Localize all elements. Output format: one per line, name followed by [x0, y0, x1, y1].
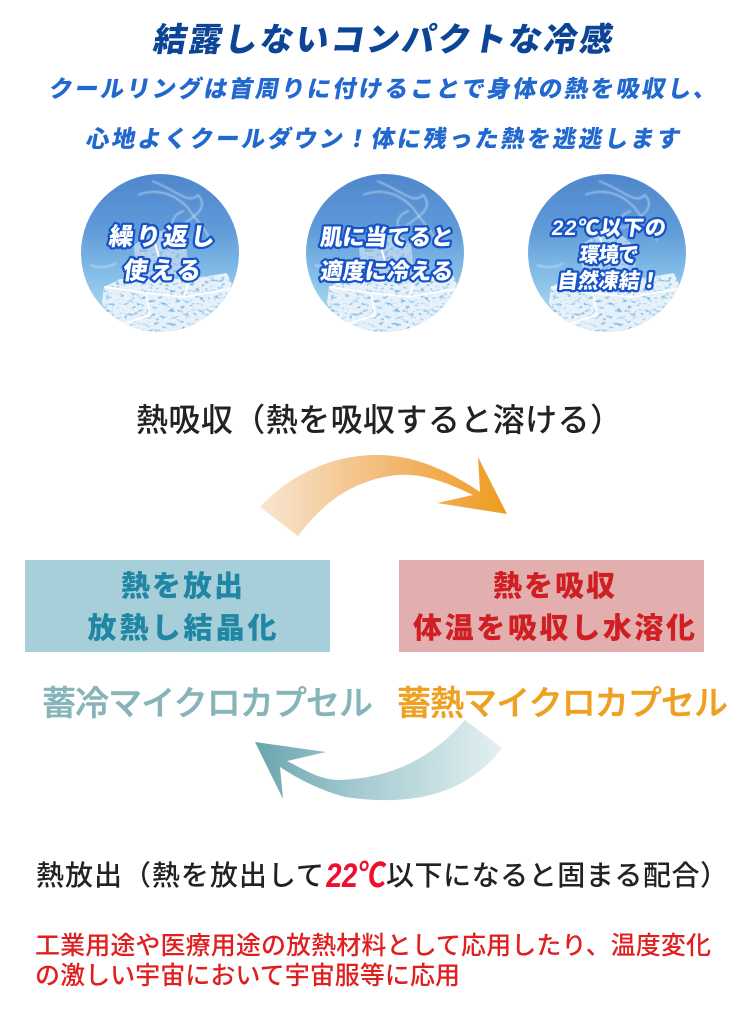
- arrow: orange curved right: [260, 455, 507, 536]
- subtitle text: クールリングは首周りに付けることで身体の熱を吸収し、: [47, 75, 720, 103]
- application note: [35, 932, 711, 990]
- feature badge: freezes below 22 degrees: 22℃以下の: [550, 217, 668, 240]
- panel: heat absorption: 熱を吸収: [493, 570, 615, 603]
- feature badge: freezes below 22 degrees: [527, 173, 687, 338]
- subtitle text: [47, 75, 720, 153]
- title: 結露しないコンパクトな冷感: [151, 21, 616, 59]
- heat release label: 熱放出（熱を放出して: [36, 860, 324, 891]
- heat release label: 以下になると固まる配合）: [386, 860, 728, 891]
- subtitle text: 心地よくクールダウン！体に残った熱を逃逃します: [84, 125, 683, 153]
- application note: 工業用途や医療用途の放熱材料として応用したり、温度変化: [35, 932, 711, 960]
- heat storage microcapsule label: 蓄熱マイクロカプセル: [397, 685, 728, 723]
- feature badge: cools when touching skin: 適度に冷える: [319, 259, 455, 284]
- heat release label: 22℃: [324, 857, 388, 895]
- heat release label: [36, 857, 728, 895]
- feature badge: reusable: [80, 173, 240, 338]
- panel: heat absorption: 体温を吸収し水溶化: [413, 612, 695, 645]
- panel: heat release: 放熱し結晶化: [88, 612, 276, 645]
- panel: heat absorption: [399, 560, 704, 652]
- feature badge: freezes below 22 degrees: 自然凍結！: [556, 268, 662, 293]
- feature badge: freezes below 22 degrees: 環境で: [578, 243, 640, 267]
- feature badge: reusable: 繰り返し: [107, 223, 217, 251]
- application note: の激しい宇宙において宇宙服等に応用: [35, 962, 460, 990]
- feature badge: reusable: 使える: [121, 257, 203, 285]
- feature badge: cools when touching skin: [305, 173, 465, 338]
- feature badge: cools when touching skin: 肌に当てると: [319, 225, 455, 250]
- arrow: teal curved left: [255, 720, 502, 800]
- panel: heat release: [25, 560, 330, 652]
- heat absorption label: 熱吸収（熱を吸収すると溶ける）: [136, 402, 622, 438]
- panel: heat release: 熱を放出: [121, 570, 243, 603]
- cool storage microcapsule label: 蓄冷マイクロカプセル: [42, 685, 373, 723]
